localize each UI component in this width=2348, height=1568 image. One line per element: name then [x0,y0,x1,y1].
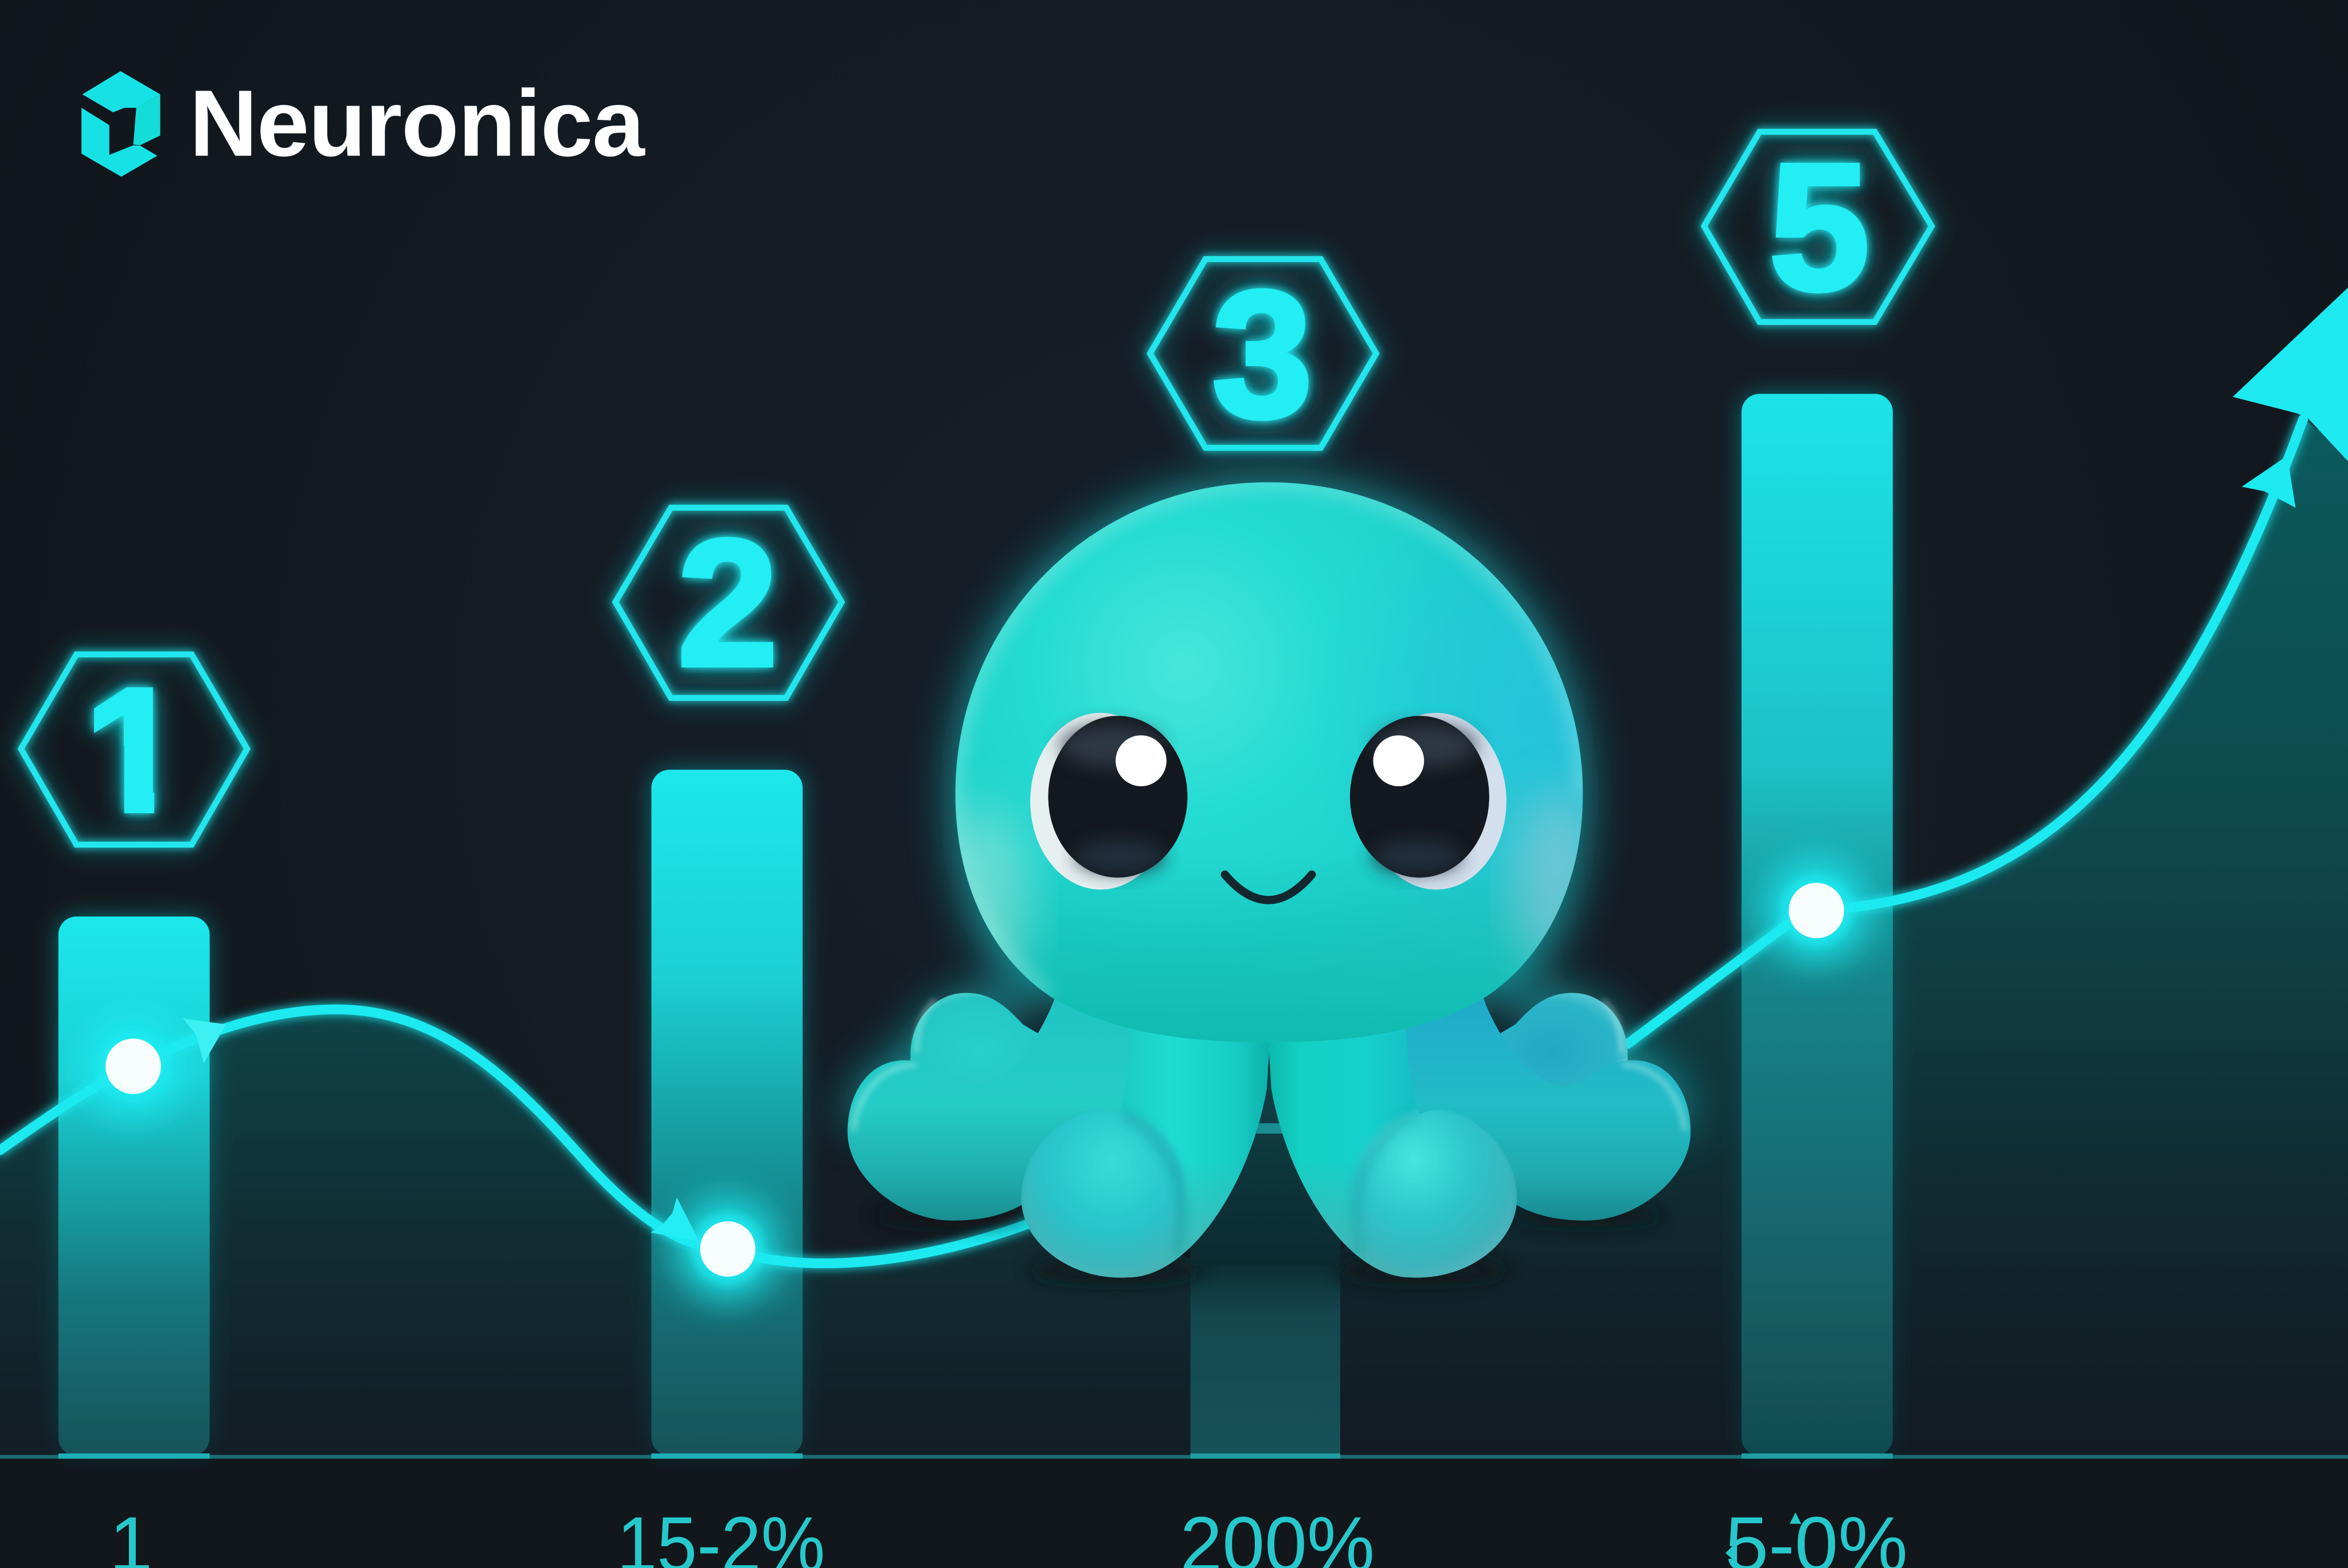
right eye [1350,713,1506,889]
arrowhead on curve 1 [183,1018,226,1063]
smile [1225,875,1312,900]
bar 3 [1191,1258,1340,1456]
area under curve: right [1288,420,2348,1456]
growth curve [0,420,2303,1263]
node 2 [700,1221,756,1277]
node 3 [1789,883,1844,938]
hexagon badge 3 [1150,254,1376,454]
logo [81,70,645,177]
node glow 3 [1763,857,1870,965]
back lobe right [1475,993,1628,1108]
ground shadows [873,1206,1665,1283]
left eye [1030,713,1188,889]
arrowhead on curve 3 [2242,458,2296,508]
hexagon badge 5 [1704,127,1932,327]
rim light arms [854,1001,1685,1131]
bar 5 [1742,394,1893,1456]
crease between legs [1269,1041,1271,1090]
hexagon badge 5: 5 [1770,127,1869,327]
outer arm left [848,989,1183,1221]
bar 1 [58,916,210,1456]
lower footer band [0,1459,2348,1568]
octopus mascot [848,472,1690,1288]
head [933,472,1599,1056]
bottom labels [109,1500,1908,1568]
hexagon badge 1 [21,651,247,852]
area under curve: left [0,1009,1288,1456]
octopus glow [848,482,1690,1132]
baseline axis [0,1453,2348,1459]
hexagon badge 2 [616,503,842,703]
node 1 [105,1038,161,1094]
leg and foot left [1022,1030,1269,1278]
hexagon badge 3: 3 [1212,254,1312,454]
arrowhead on curve 2 [651,1197,699,1241]
hexagon badge 1: 1 [84,651,184,852]
back lobe left [910,993,1063,1108]
large arrowhead [2233,288,2348,461]
leg and foot right [1269,1029,1517,1278]
logo icon [81,71,161,177]
bar 2 [651,770,803,1456]
logo wordmark: Neuronica [189,70,645,176]
outer arm right [1355,989,1690,1221]
node glow 2 [674,1195,782,1303]
curve glimpse [1257,1123,1283,1134]
label glitch marks [1727,1514,1800,1562]
gap between legs [1191,1071,1340,1265]
hexagon badge 2: 2 [678,503,778,703]
node glow 1 [79,1013,187,1120]
